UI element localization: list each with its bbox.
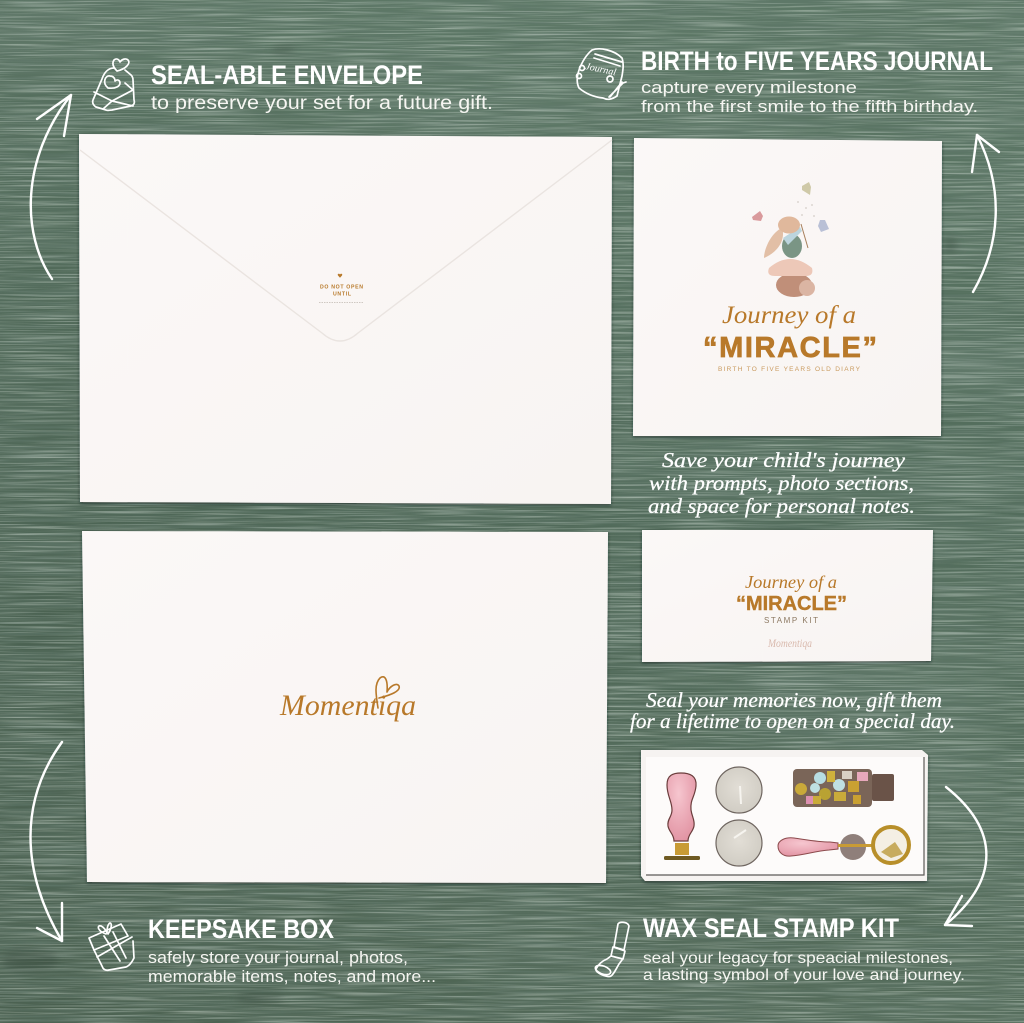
panel: stamp kit box: [642, 530, 933, 662]
journal title script: Journey of a: [722, 302, 856, 329]
script note: journal: [648, 448, 915, 518]
illustration: bunny on mushroom: [752, 182, 829, 297]
envelope date line: [319, 302, 364, 304]
subheading: box line one: safely store your journal, photos,: [148, 948, 408, 967]
panel: envelope: [79, 134, 612, 504]
envelope heart: [338, 274, 342, 278]
tea candle top: [716, 767, 762, 813]
wax melting spoon: [778, 827, 909, 863]
icon: wax stamp: [594, 922, 629, 976]
heading: seal-able envelope: SEAL-ABLE ENVELOPE: [151, 60, 423, 90]
box logo: Momentiqa: [279, 689, 416, 722]
stamp box subtitle: STAMP KIT: [764, 616, 818, 625]
subheading: journal line two: from the first smile to the fifth birthday.: [641, 97, 978, 116]
icon: gift box: [89, 923, 134, 970]
subheading: envelope: to preserve your set for a future gift.: [151, 93, 493, 114]
stamp box logo: Momentiqa: [767, 636, 812, 650]
wax bead bottle: [793, 769, 894, 807]
heading: wax seal stamp kit: WAX SEAL STAMP KIT: [643, 913, 899, 943]
subheading: kit line two: a lasting symbol of your love and journey.: [643, 967, 965, 984]
script note: stamp kit: for a lifetime to open on a special day.: [630, 709, 955, 733]
arrow: top right: [972, 135, 999, 292]
stamp box bold title: “MIRACLE”: [736, 593, 847, 615]
heading: journal: [641, 46, 993, 116]
panel: wax seal kit tray: [641, 750, 928, 881]
arrow: bottom left: [30, 742, 62, 941]
journal title bold: “MIRACLE”: [703, 332, 877, 364]
script note: journal: and space for personal notes.: [648, 494, 915, 518]
panel: keepsake box: [82, 531, 608, 883]
icon: journal: [576, 49, 626, 99]
subheading: journal line one: capture every milestone: [641, 78, 857, 97]
panel: journal: [633, 138, 942, 436]
arrow: top left: [31, 95, 71, 279]
icon: envelope with hearts: [93, 59, 134, 110]
heading: keepsake box: [148, 914, 436, 986]
script note: stamp kit: [630, 688, 955, 733]
subheading: kit line one: seal your legacy for speacial milestones,: [643, 950, 953, 967]
envelope label: DO NOT OPEN: [320, 284, 363, 290]
envelope flap: [80, 140, 612, 341]
journal subtitle: BIRTH TO FIVE YEARS OLD DIARY: [718, 366, 861, 373]
heading: wax seal stamp kit: [643, 913, 965, 984]
heading: keepsake box: KEEPSAKE BOX: [148, 914, 334, 944]
subheading: box line two: memorable items, notes, and more...: [148, 967, 436, 986]
envelope label second line: UNTIL: [333, 292, 352, 298]
stamp box script title: Journey of a: [745, 572, 837, 592]
icon: journal: Journal: [584, 61, 617, 78]
script note: journal: with prompts, photo sections,: [649, 471, 914, 495]
script note: journal: Save your child's journey: [662, 448, 906, 472]
tea candle bottom: [716, 820, 762, 866]
script note: stamp kit: Seal your memories now, gift them: [646, 688, 942, 712]
wax stamp: [664, 773, 700, 860]
heading: seal-able envelope: [151, 60, 493, 114]
arrow: bottom right: [945, 787, 986, 926]
